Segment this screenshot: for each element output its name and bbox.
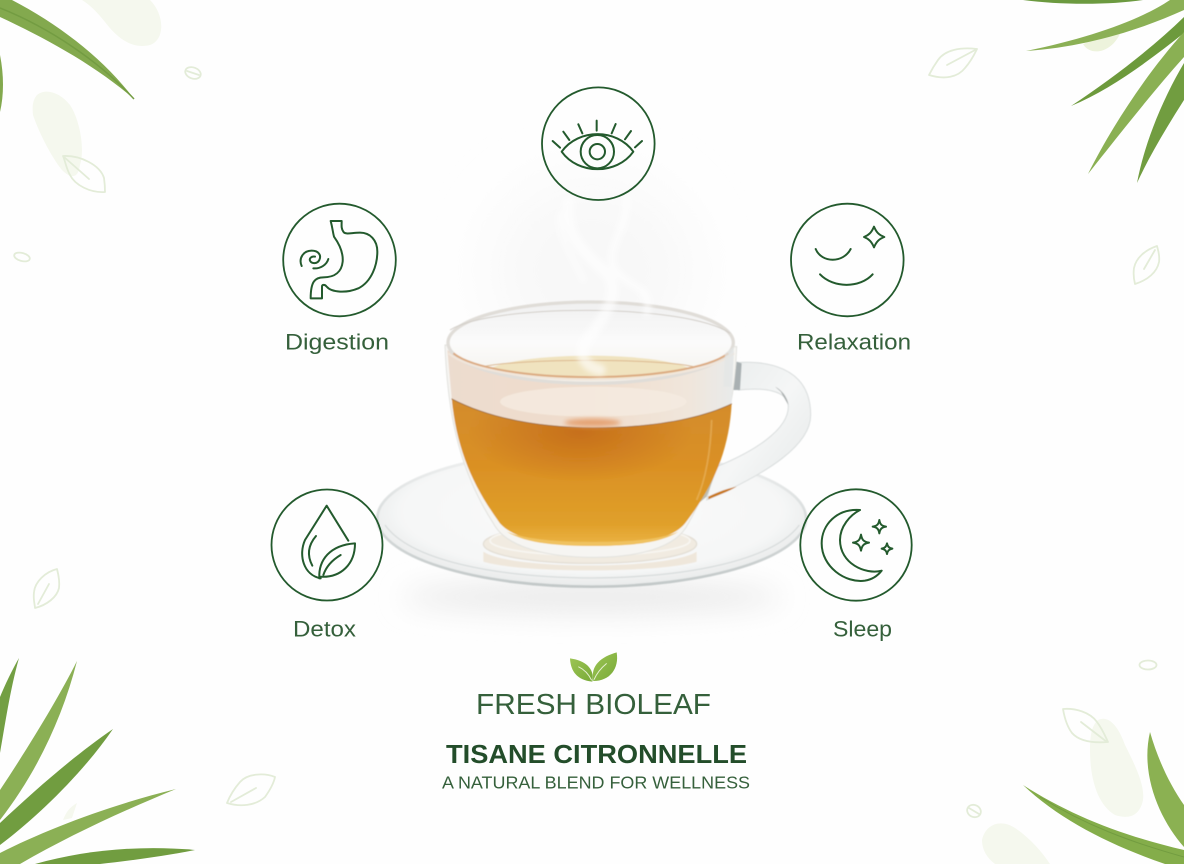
lemongrass top left bbox=[0, 0, 134, 112]
cup handle bbox=[697, 362, 811, 505]
lemongrass top right bbox=[1023, 0, 1184, 183]
icon: eye bbox=[542, 87, 655, 200]
label: Sleep: Sleep bbox=[833, 616, 892, 642]
subtitle: A NATURAL BLEND FOR WELLNESS bbox=[442, 772, 750, 792]
label: Digestion: Digestion bbox=[285, 330, 389, 354]
cup interior and rim bbox=[448, 302, 734, 394]
soft glow behind cup bbox=[402, 180, 782, 613]
saucer bbox=[377, 450, 806, 587]
brand name: FRESH BIOLEAF bbox=[476, 689, 711, 721]
glass band above tea bbox=[447, 350, 734, 427]
icon: sleep moon and stars bbox=[800, 489, 912, 601]
tea liquid bbox=[452, 398, 732, 546]
cup body glass bbox=[445, 345, 737, 557]
logo leaves bbox=[570, 652, 617, 682]
lemongrass bottom right bbox=[1023, 732, 1184, 864]
icon: detox drop and leaf bbox=[272, 490, 382, 600]
label: Relaxation: Relaxation bbox=[797, 330, 911, 354]
tea cup on saucer bbox=[377, 200, 811, 587]
label: Detox: Detox bbox=[293, 616, 356, 642]
lemongrass bottom left bbox=[0, 658, 195, 864]
title: TISANE CITRONNELLE bbox=[446, 739, 747, 769]
icon: relaxation face bbox=[791, 204, 904, 316]
icon: digestion stomach bbox=[283, 204, 396, 316]
steam bbox=[560, 200, 648, 370]
